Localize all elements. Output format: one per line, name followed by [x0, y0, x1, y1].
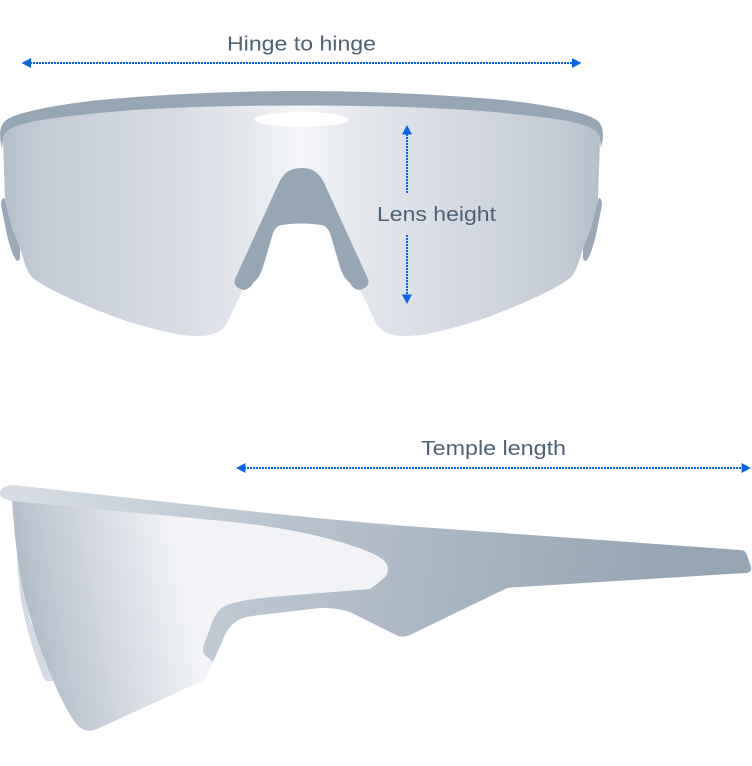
label: temple length: Temple length	[421, 437, 566, 460]
rear lens edge	[17, 555, 56, 681]
side view glasses	[0, 485, 751, 731]
label: hinge to hinge: Hinge to hinge	[227, 32, 376, 56]
top frame	[0, 91, 603, 148]
side lens	[12, 500, 388, 731]
temple arm	[0, 485, 751, 662]
arrow: temple length	[236, 463, 751, 473]
highlight	[254, 112, 348, 127]
nose notch	[243, 224, 360, 300]
right side arm	[583, 198, 602, 261]
arrow: lens height	[402, 125, 412, 304]
left side arm	[1, 198, 20, 261]
nose bridge	[234, 168, 369, 290]
label: lens height: Lens height	[377, 203, 496, 226]
front view glasses	[0, 91, 603, 336]
front lens	[3, 106, 600, 336]
arrow: hinge to hinge	[22, 58, 582, 68]
